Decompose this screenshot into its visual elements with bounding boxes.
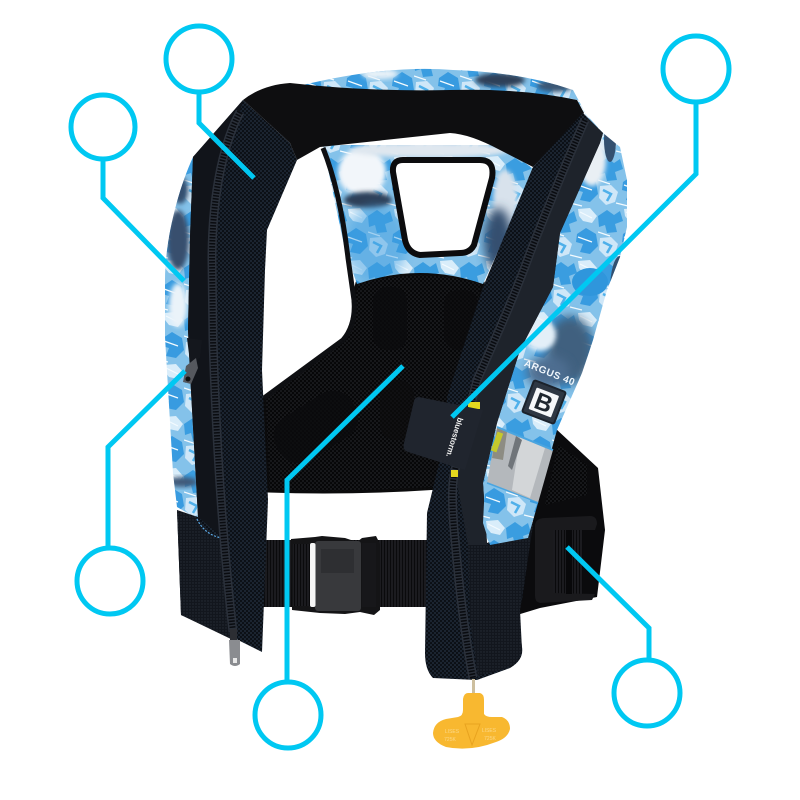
yellow pull handle: 725K — [444, 737, 456, 743]
side release buckle — [291, 536, 380, 615]
stitching — [197, 519, 221, 538]
waist belt webbing — [262, 540, 432, 607]
handle embossed lettering: LISES — [445, 729, 460, 735]
life vest — [160, 60, 640, 749]
brand patch: B — [531, 388, 556, 419]
callout: bladder — [71, 95, 184, 281]
yellow pull handle — [433, 693, 510, 749]
callout: pull tab — [452, 36, 729, 417]
zipper pull — [229, 629, 240, 666]
callout: zipper — [77, 371, 185, 614]
fabric band — [455, 118, 603, 545]
padding: upper pad right — [444, 290, 478, 350]
back camo panel — [323, 145, 532, 284]
callout: collar — [166, 26, 254, 178]
model name: ARGUS 40 — [522, 358, 577, 389]
left front strap — [177, 100, 297, 666]
pull tab — [404, 397, 483, 470]
padding: center pad — [380, 380, 414, 440]
main zipper — [212, 112, 240, 632]
right camo bladder — [483, 113, 627, 542]
main zipper — [452, 120, 585, 678]
panel edge binding — [264, 148, 354, 398]
inflator pull cord — [472, 679, 475, 695]
neck collar — [243, 83, 584, 167]
yellow pull handle: LISES — [482, 728, 497, 734]
top camo collar edge — [305, 68, 585, 112]
lower camo panel — [483, 483, 538, 545]
small pocket zipper — [183, 338, 202, 384]
padding: lower pad — [265, 382, 367, 472]
back panel mesh — [264, 274, 483, 492]
callout: back mesh — [255, 366, 403, 748]
yellow pull handle: 725K — [484, 736, 496, 742]
brand patch — [522, 358, 577, 424]
left camo bladder — [165, 157, 198, 517]
yellow strap tags — [451, 402, 480, 477]
right webbing buckle — [535, 516, 597, 603]
lower pocket mesh — [468, 525, 533, 676]
fabric strip — [188, 100, 243, 537]
tab brand name: bluestorm. — [444, 416, 465, 458]
padding: upper pad left — [373, 287, 407, 350]
head opening — [393, 160, 492, 255]
right front strap — [425, 113, 603, 680]
right waist belt pad — [500, 428, 605, 615]
lower black pocket — [177, 510, 233, 640]
cylinder window — [487, 427, 553, 503]
callout: belt buckle — [567, 547, 680, 726]
